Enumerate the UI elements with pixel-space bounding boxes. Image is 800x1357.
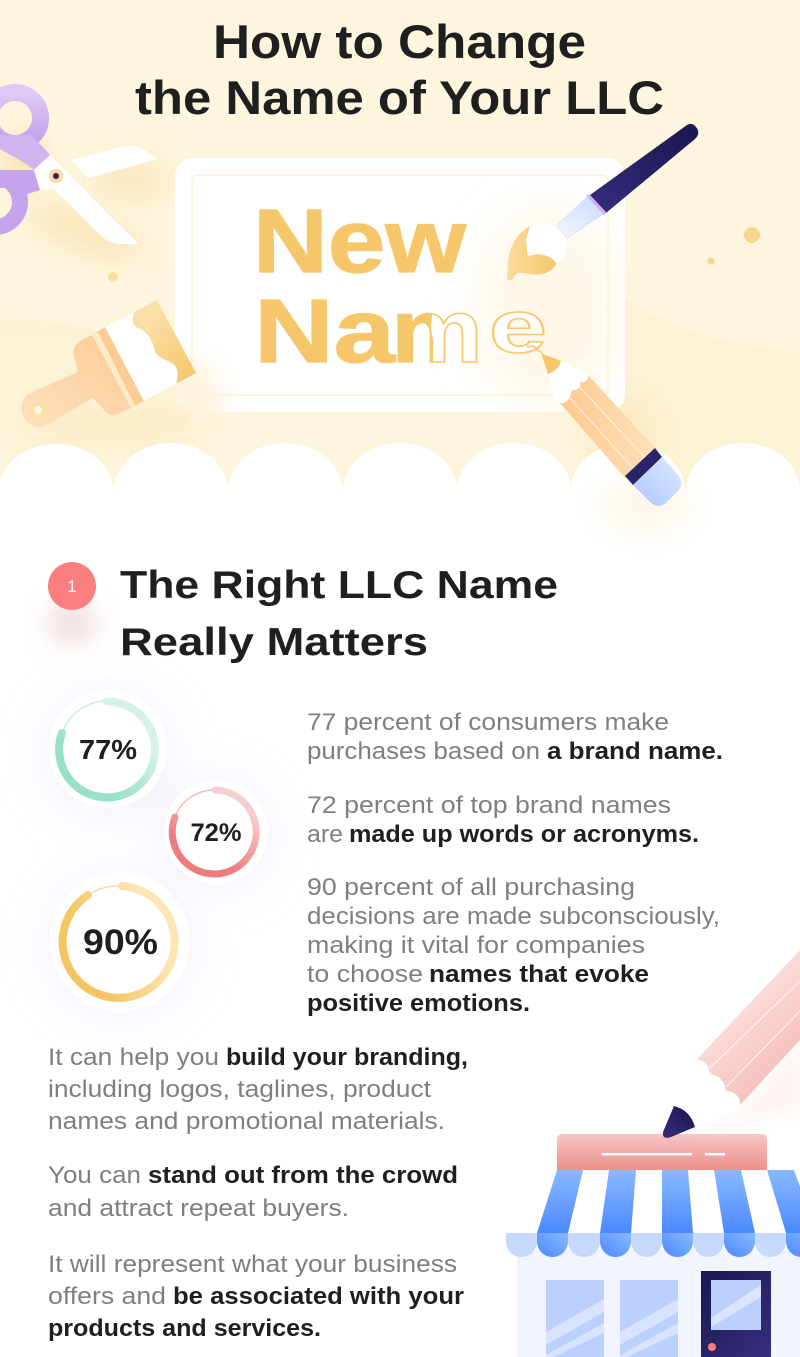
text: stat 72 xyxy=(307,792,699,848)
text: New Name: m xyxy=(391,282,483,382)
text: stat 72: 72 percent of top brand names xyxy=(307,792,671,819)
section heading: Really Matters xyxy=(120,621,428,664)
text: represent: offers and xyxy=(48,1283,166,1310)
text: stand out: You can xyxy=(48,1162,141,1189)
text: stat 90: making it vital for companies xyxy=(307,932,645,959)
text: stat 77 xyxy=(307,709,723,765)
text: New Name xyxy=(259,209,545,364)
text: stat 77: a brand name. xyxy=(547,738,723,765)
name card xyxy=(175,158,625,412)
text: stat 77: purchases based on xyxy=(307,738,540,765)
stat ring: 72%: 72% xyxy=(190,819,242,847)
section number badge xyxy=(48,562,96,642)
store awning xyxy=(506,1170,800,1257)
scalloped edge xyxy=(0,443,800,569)
store xyxy=(506,1134,800,1357)
text: represent xyxy=(48,1251,464,1342)
pencil glow on scallops xyxy=(600,477,690,533)
text: branding: It can help you xyxy=(48,1044,219,1071)
circle shadows xyxy=(48,695,268,1013)
section heading: The Right LLC Name xyxy=(120,564,558,607)
dot: left xyxy=(108,272,118,282)
store sign xyxy=(557,1134,767,1170)
icon: pencil xyxy=(541,353,681,506)
text: stat 90 xyxy=(307,874,720,1017)
text: represent: be associated with your xyxy=(173,1283,464,1310)
text: New Name: m xyxy=(391,282,483,382)
text: New Name: e xyxy=(489,286,547,368)
text: New Name: New xyxy=(253,192,467,292)
title: How to Change xyxy=(213,15,586,68)
text: represent: products and services. xyxy=(48,1315,321,1342)
stat ring: 90%: 90% xyxy=(83,923,158,962)
text: represent: It will represent what your business xyxy=(48,1251,457,1278)
text: stand out: and attract repeat buyers. xyxy=(48,1195,349,1222)
text: stat 72: are xyxy=(307,821,343,848)
title xyxy=(135,15,664,124)
title: the Name of Your LLC xyxy=(135,71,664,124)
header background xyxy=(0,0,800,500)
text: stat 90: decisions are made subconsciously, xyxy=(307,903,720,930)
text: stat 90: positive emotions. xyxy=(307,990,530,1017)
stat ring: 77%: 77% xyxy=(79,734,137,765)
store door xyxy=(701,1271,771,1357)
text: branding: names and promotional materials. xyxy=(48,1108,445,1135)
section heading xyxy=(120,564,558,664)
text: stat 72: made up words or acronyms. xyxy=(349,821,699,848)
text: stat 90: 90 percent of all purchasing xyxy=(307,874,635,901)
text: stand out xyxy=(48,1162,458,1222)
stat ring: 90% xyxy=(50,872,190,1012)
text: stand out: stand out from the crowd xyxy=(148,1162,458,1189)
stat ring: 72% xyxy=(164,780,268,884)
icon: wide paint brush xyxy=(22,300,196,427)
text: stat 90: to choose xyxy=(307,961,423,988)
section number badge: 1 xyxy=(67,577,77,596)
text: branding: including logos, taglines, product xyxy=(48,1076,431,1103)
text: stat 77: 77 percent of consumers make xyxy=(307,709,669,736)
icon: round paint brush xyxy=(507,124,698,281)
text: branding xyxy=(48,1044,468,1135)
icon: pink pencil xyxy=(663,950,800,1138)
store building xyxy=(517,1250,800,1357)
text: New Name: Na xyxy=(254,282,396,382)
icon: scissors xyxy=(0,92,158,244)
stat ring: 77% xyxy=(49,690,167,808)
dots: right xyxy=(708,227,760,264)
text: stat 90: names that evoke xyxy=(429,961,649,988)
text: branding: build your branding, xyxy=(226,1044,468,1071)
